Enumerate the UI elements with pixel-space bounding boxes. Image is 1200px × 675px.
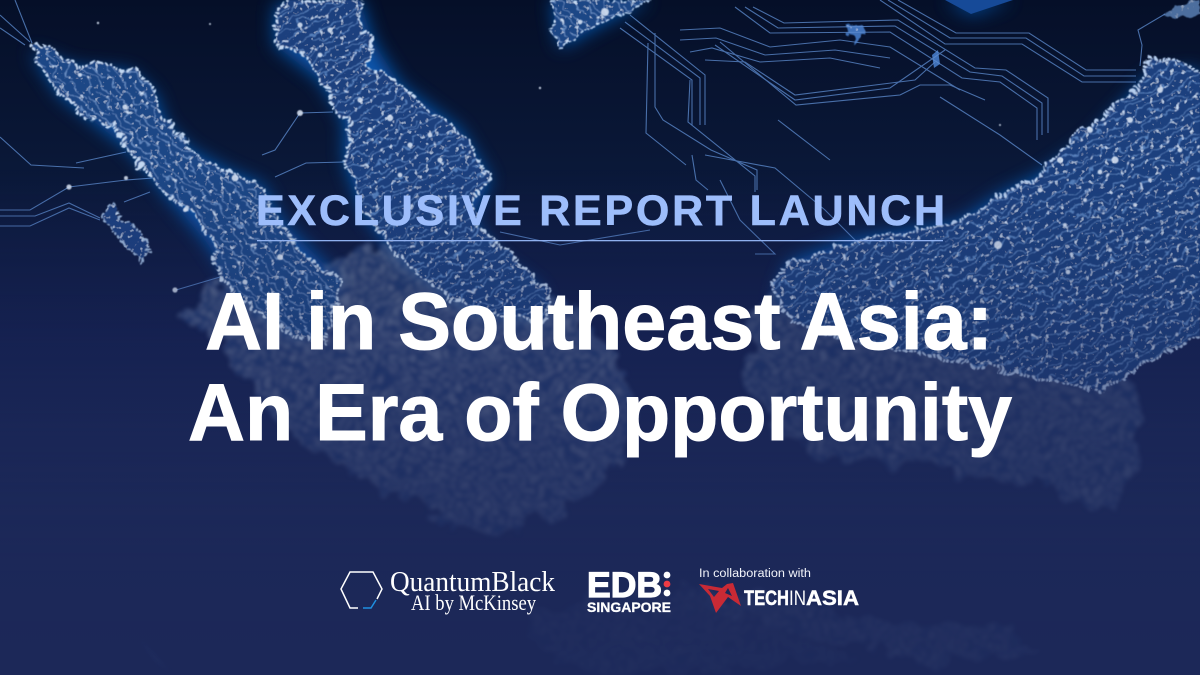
divider rule	[257, 240, 943, 241]
logo: EDB Singapore: EDB	[587, 566, 662, 605]
logo: Tech in Asia: TECH	[744, 587, 789, 610]
eyebrow: exclusive report launch: EXCLUSIVE REPORT LAUNCH	[256, 187, 945, 235]
circuit traces	[0, 0, 1165, 290]
title: AI in Southeast Asia:	[205, 277, 993, 367]
title	[188, 277, 1012, 458]
land: faded southern island chain	[175, 240, 1140, 675]
city lights	[66, 8, 1182, 293]
land: small western island	[103, 205, 150, 260]
logo: Tech in Asia: IN	[789, 587, 806, 610]
land: central peninsula	[274, 0, 548, 322]
text: in collaboration with: In collaboration with	[699, 568, 811, 580]
logo: QuantumBlack AI by McKinsey	[341, 566, 555, 615]
land: eastern island	[772, 58, 1200, 390]
logo: EDB Singapore: SINGAPORE	[587, 599, 671, 615]
land: top centre island	[552, 0, 654, 47]
logo: Tech in Asia	[699, 583, 859, 613]
logo: QuantumBlack AI by McKinsey: QuantumBlack	[390, 566, 555, 598]
icon: hexagon	[341, 572, 382, 608]
icon: red TIA mark	[699, 583, 741, 613]
title: An Era of Opportunity	[188, 368, 1012, 458]
land glow	[30, 0, 1200, 340]
logo: QuantumBlack AI by McKinsey: AI by McKinsey	[411, 590, 536, 615]
logo: Tech in Asia: ASIA	[806, 587, 859, 610]
land: top right fragments	[945, 0, 1013, 14]
land: northern island	[32, 44, 340, 345]
